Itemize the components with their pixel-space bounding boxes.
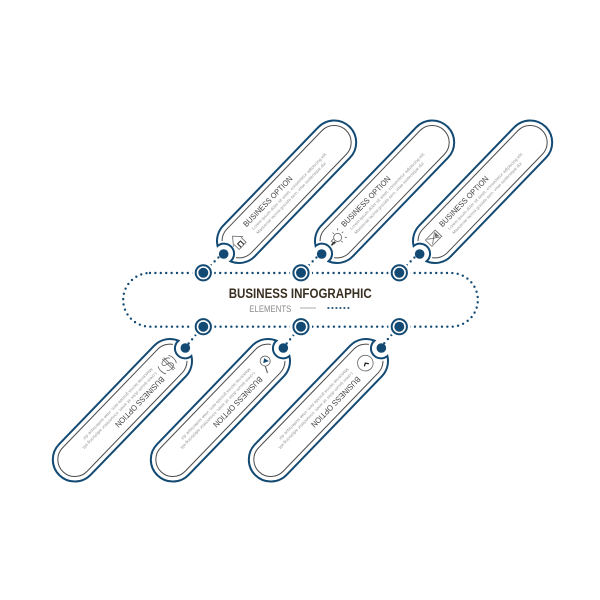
body text: Lorem ipsum dolor sit amet, consectetur adipiscing elit. <box>447 151 524 231</box>
connector: bottom 3 <box>380 331 395 348</box>
panel: bottom option 1 <box>44 328 203 491</box>
body text: Maecenas lacinia gravida sem, vitae scelerisque dui <box>353 161 425 235</box>
body text: Maecenas lacinia gravida sem, vitae scelerisque dui <box>451 161 523 235</box>
icon: light bulb <box>326 227 348 250</box>
body text: Maecenas lacinia gravida sem, vitae scelerisque dui <box>82 367 154 441</box>
heading: BUSINESS OPTION <box>113 375 166 429</box>
panel: bottom option 3 <box>240 328 399 491</box>
panel: top option 2 <box>304 111 463 274</box>
connector: top 3 <box>403 253 419 269</box>
panel: top option 3 <box>402 111 561 274</box>
body text: Lorem ipsum dolor sit amet, consectetur adipiscing elit. <box>277 371 354 451</box>
node: top 3 <box>388 262 410 284</box>
connector: top 1 <box>207 253 223 269</box>
subtitle solid rule <box>300 307 316 309</box>
connector: top 2 <box>305 253 321 269</box>
body text: Maecenas lacinia gravida sem, vitae scelerisque dui <box>255 161 327 235</box>
node: bottom 2 <box>290 316 312 338</box>
heading: BUSINESS OPTION <box>309 375 362 429</box>
connector: bottom 2 <box>283 331 297 348</box>
body text: Lorem ipsum dolor sit amet, consectetur adipiscing elit. <box>349 151 426 231</box>
icon: clock <box>354 352 376 374</box>
panel: top option 1 <box>206 111 365 274</box>
node: bottom 3 <box>388 316 410 338</box>
body text: Lorem ipsum dolor sit amet, consectetur adipiscing elit. <box>179 371 256 451</box>
body text: Lorem ipsum dolor sit amet, consectetur adipiscing elit. <box>81 371 158 451</box>
dotted central loop <box>123 273 478 327</box>
icon: magnifier <box>257 354 276 373</box>
subtitle dotted rule <box>328 307 350 309</box>
icon: hourglass <box>425 230 442 246</box>
heading: BUSINESS OPTION <box>211 375 264 429</box>
body text: Maecenas lacinia gravida sem, vitae scelerisque dui <box>180 367 252 441</box>
node: top 1 <box>192 262 214 284</box>
node: top 2 <box>290 262 312 284</box>
subtitle: ELEMENTS <box>249 304 291 314</box>
heading: BUSINESS OPTION <box>438 174 491 229</box>
connector: bottom 1 <box>185 331 199 348</box>
body text: Lorem ipsum dolor sit amet, consectetur adipiscing elit. <box>251 151 328 231</box>
heading: BUSINESS OPTION <box>340 174 393 229</box>
title: BUSINESS INFOGRAPHIC <box>229 286 372 301</box>
body text: Maecenas lacinia gravida sem, vitae scelerisque dui <box>278 367 350 441</box>
node: bottom 1 <box>192 316 214 338</box>
icon: dollar <box>156 353 180 377</box>
heading: BUSINESS OPTION <box>242 174 295 229</box>
icon: house <box>228 231 247 251</box>
panel: bottom option 2 <box>142 328 301 491</box>
